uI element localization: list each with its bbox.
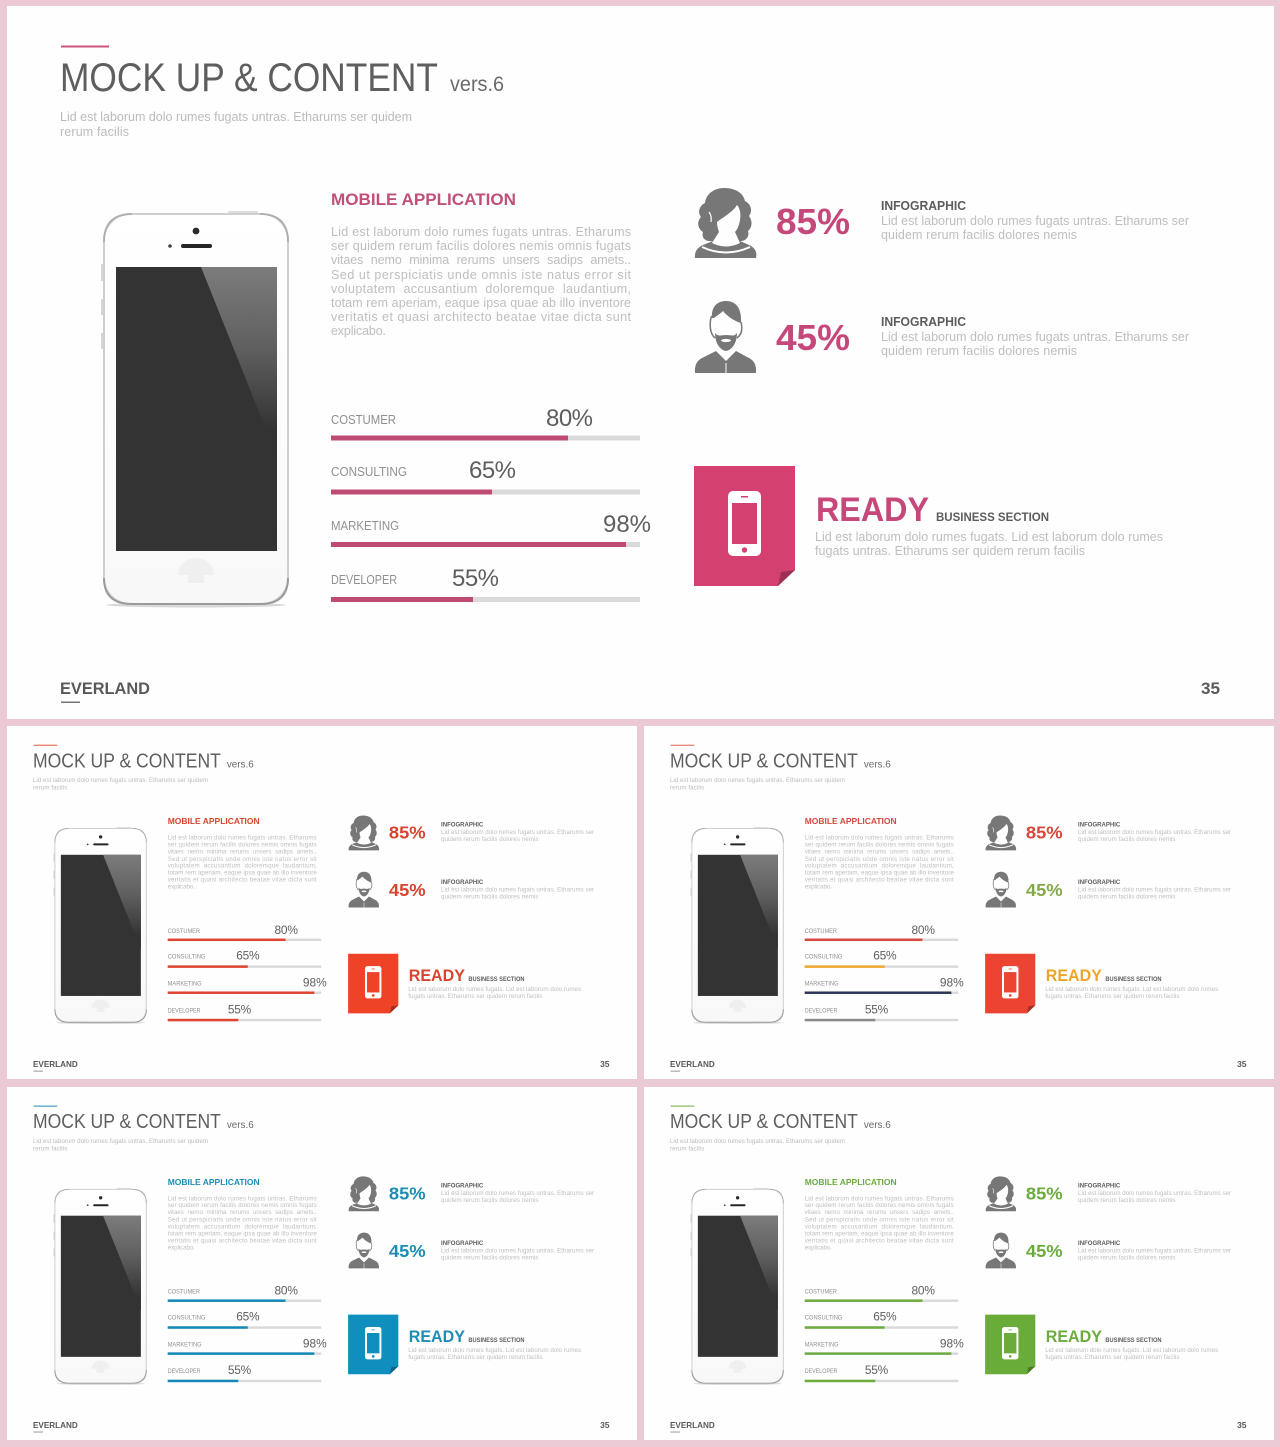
bar: consulting 65%: 65%: [469, 457, 516, 484]
text block: infographic 2: INFOGRAPHIC: [1078, 1240, 1121, 1247]
stat: 45%: 45%: [1026, 880, 1063, 900]
footer brand: EVERLAND: [33, 1059, 78, 1069]
callout: ready: Lid est laborum dolo rumes fugats. Lid est laborum dolo rumes: [408, 1347, 581, 1354]
title: vers.6: [227, 1120, 254, 1131]
bar: consulting 65%: 65%: [236, 949, 260, 963]
text block: description: Lid est laborum dolo rumes fugats untras. Etharums: [805, 1195, 954, 1202]
subtitle: Lid est laborum dolo rumes fugats untras. Etharums ser quidem: [33, 1138, 208, 1145]
icon: man: [695, 301, 756, 373]
page number: 35: [600, 1059, 610, 1069]
text block: description: voluptatem accusantium doloremque laudantium,: [331, 282, 631, 296]
callout: ready: fugats untras. Etharums ser quidem rerum facilis: [1045, 1354, 1179, 1361]
stat: 85%: 85%: [389, 822, 426, 842]
text block: infographic 1: [441, 1182, 594, 1204]
bar: developer 55%: 55%: [452, 565, 499, 592]
stat: 85%: 85%: [389, 1183, 426, 1203]
bar: costumer 80%: 80%: [912, 1284, 935, 1298]
text block: infographic 2: [881, 314, 1189, 358]
text block: infographic 1: INFOGRAPHIC: [441, 1182, 484, 1189]
bar: marketing 98%: 98%: [603, 511, 651, 538]
bar chart: [168, 923, 327, 1021]
panel: multicolour slide: [644, 726, 1274, 1079]
text block: description: explicabo.: [805, 1244, 832, 1251]
icon: woman: [986, 816, 1016, 850]
bar: costumer 80%: 80%: [275, 923, 298, 937]
bar: costumer 80%: [805, 1284, 958, 1302]
icon: man: [349, 872, 379, 907]
icon: woman: [349, 1176, 379, 1211]
bar: marketing 98%: MARKETING: [168, 1341, 202, 1348]
heading: mobile application: MOBILE APPLICATION: [168, 816, 260, 826]
callout: ready: BUSINESS SECTION: [468, 977, 525, 983]
bar: marketing 98%: 98%: [940, 1336, 964, 1350]
phone mockup: [53, 1188, 146, 1385]
stat: 45%: 45%: [389, 880, 426, 900]
callout: ready: BUSINESS SECTION: [1105, 977, 1162, 983]
text block: description: ser quidem rerum facilis dolores nemis omnis fugats: [805, 841, 954, 848]
subtitle: [670, 777, 845, 792]
title: MOCK UP & CONTENT: [670, 1111, 858, 1133]
text block: infographic 2: quidem rerum facilis dolores nemis: [1078, 894, 1175, 901]
phone mockup: [690, 1188, 783, 1385]
text block: infographic 1: INFOGRAPHIC: [881, 198, 967, 213]
bar: marketing 98%: [168, 976, 327, 994]
text block: description: voluptatem accusantium doloremque laudantium,: [805, 1224, 954, 1231]
bar: costumer 80%: COSTUMER: [805, 928, 837, 935]
title: MOCK UP & CONTENT: [670, 750, 858, 772]
callout: ready: Lid est laborum dolo rumes fugats. Lid est laborum dolo rumes: [1045, 1347, 1218, 1354]
text block: description: explicabo.: [168, 1244, 195, 1251]
bar: developer 55%: [805, 1002, 958, 1021]
bar: consulting 65%: [331, 457, 640, 494]
text block: infographic 1: [441, 821, 594, 843]
icon: phone badge: [348, 1315, 398, 1374]
bar: costumer 80%: COSTUMER: [805, 1289, 837, 1296]
text block: infographic 2: INFOGRAPHIC: [441, 1240, 484, 1247]
bar: marketing 98%: MARKETING: [168, 981, 202, 988]
title: MOCK UP & CONTENT: [60, 56, 438, 100]
text block: infographic 2: [1078, 879, 1231, 901]
stat: 45%: 45%: [776, 317, 850, 358]
icon: man: [986, 1233, 1016, 1268]
bar: consulting 65%: CONSULTING: [805, 954, 842, 961]
subtitle: rerum facilis: [670, 1146, 704, 1153]
bar chart: [331, 405, 651, 602]
stat: 45%: 45%: [389, 1241, 426, 1261]
callout: ready: Lid est laborum dolo rumes fugats. Lid est laborum dolo rumes: [815, 530, 1163, 544]
bar: developer 55%: 55%: [228, 1002, 252, 1016]
bar chart: [805, 1284, 964, 1382]
text block: infographic 1: Lid est laborum dolo rumes fugats untras. Etharums ser: [1078, 829, 1231, 836]
text block: infographic 2: [441, 879, 594, 901]
bar: developer 55%: 55%: [228, 1363, 252, 1377]
icon: woman: [349, 816, 379, 850]
bar: costumer 80%: COSTUMER: [168, 928, 200, 935]
title: MOCK UP & CONTENT: [33, 750, 221, 772]
bar: developer 55%: DEVELOPER: [805, 1007, 838, 1014]
callout: ready: fugats untras. Etharums ser quidem rerum facilis: [1045, 993, 1179, 1000]
phone mockup: [101, 211, 288, 608]
subtitle: Lid est laborum dolo rumes fugats untras. Etharums ser quidem: [33, 777, 208, 784]
text block: infographic 1: [1078, 821, 1231, 843]
bar: consulting 65%: [168, 1310, 321, 1329]
bar: costumer 80%: [331, 405, 640, 440]
bar: consulting 65%: [805, 1310, 958, 1329]
heading: mobile application: MOBILE APPLICATION: [168, 1177, 260, 1187]
text block: description: vitaes nemo minima rerums unsers sadips amets..: [168, 848, 317, 855]
page number: 35: [1201, 679, 1220, 698]
bar: costumer 80%: [168, 923, 321, 941]
heading: mobile application: MOBILE APPLICATION: [805, 1177, 897, 1187]
text block: description: [331, 225, 632, 338]
text block: description: voluptatem accusantium doloremque laudantium,: [168, 1224, 317, 1231]
subtitle: Lid est laborum dolo rumes fugats untras. Etharums ser quidem: [60, 110, 412, 124]
subtitle: Lid est laborum dolo rumes fugats untras. Etharums ser quidem: [670, 1138, 845, 1145]
footer brand: EVERLAND: [670, 1420, 715, 1430]
text block: description: veritatis et quasi architecto beatae vitae dicta sunt: [331, 310, 632, 324]
stat: 85%: 85%: [776, 201, 850, 242]
callout: ready: fugats untras. Etharums ser quidem rerum facilis: [408, 1354, 542, 1361]
panel: green slide: [644, 1087, 1274, 1440]
text block: infographic 2: INFOGRAPHIC: [441, 879, 484, 886]
text block: infographic 1: INFOGRAPHIC: [1078, 1182, 1121, 1189]
text block: description: Lid est laborum dolo rumes fugats untras. Etharums: [805, 834, 954, 841]
text block: description: totam rem aperiam, eaque ipsa quae ab illo inventore: [805, 870, 954, 877]
callout: ready: BUSINESS SECTION: [468, 1338, 525, 1344]
heading: mobile application: MOBILE APPLICATION: [805, 816, 897, 826]
bar: marketing 98%: [331, 511, 651, 547]
text block: description: totam rem aperiam, eaque ipsa quae ab illo inventore: [168, 1231, 317, 1238]
stat: 85%: 85%: [1026, 1183, 1063, 1203]
panel: main slide (magenta): [7, 6, 1274, 719]
bar: developer 55%: 55%: [865, 1363, 889, 1377]
text block: description: veritatis et quasi architecto beatae vitae dicta sunt: [168, 877, 317, 884]
text block: description: totam rem aperiam, eaque ipsa quae ab illo inventore: [805, 1231, 954, 1238]
callout: ready: [1045, 1327, 1218, 1361]
callout: ready: READY: [816, 491, 929, 529]
text block: infographic 2: Lid est laborum dolo rumes fugats untras. Etharums ser: [881, 330, 1189, 344]
icon: man: [986, 872, 1016, 907]
bar chart: [805, 923, 964, 1021]
text block: description: [168, 1195, 317, 1251]
stat: 85%: 85%: [1026, 822, 1063, 842]
bar: consulting 65%: 65%: [873, 1310, 897, 1324]
text block: infographic 1: Lid est laborum dolo rumes fugats untras. Etharums ser: [441, 829, 594, 836]
text block: description: [805, 834, 954, 891]
bar: consulting 65%: [805, 949, 958, 968]
text block: infographic 1: INFOGRAPHIC: [441, 821, 484, 828]
text block: description: Lid est laborum dolo rumes fugats untras. Etharums: [331, 225, 631, 239]
callout: ready: [408, 1327, 581, 1361]
text block: description: vitaes nemo minima rerums unsers sadips amets..: [805, 1209, 954, 1216]
bar: consulting 65%: CONSULTING: [331, 464, 407, 479]
text block: description: vitaes nemo minima rerums unsers sadips amets..: [805, 848, 954, 855]
bar: consulting 65%: 65%: [236, 1310, 260, 1324]
text block: infographic 2: INFOGRAPHIC: [881, 314, 967, 329]
bar: developer 55%: DEVELOPER: [805, 1368, 838, 1375]
text block: description: explicabo.: [331, 324, 386, 338]
bar: developer 55%: [168, 1363, 321, 1382]
bar: developer 55%: DEVELOPER: [331, 572, 397, 587]
text block: description: voluptatem accusantium doloremque laudantium,: [168, 863, 317, 870]
callout: ready: Lid est laborum dolo rumes fugats. Lid est laborum dolo rumes: [408, 986, 581, 993]
bar: developer 55%: [168, 1002, 321, 1021]
text block: infographic 1: Lid est laborum dolo rumes fugats untras. Etharums ser: [881, 214, 1189, 228]
panel: red slide: [7, 726, 637, 1079]
text block: infographic 2: Lid est laborum dolo rumes fugats untras. Etharums ser: [1078, 887, 1231, 894]
icon: phone badge: [348, 954, 398, 1013]
bar: developer 55%: DEVELOPER: [168, 1007, 201, 1014]
text block: description: [168, 834, 317, 891]
callout: ready: READY: [409, 1327, 465, 1346]
bar: costumer 80%: COSTUMER: [168, 1289, 200, 1296]
text block: infographic 1: Lid est laborum dolo rumes fugats untras. Etharums ser: [1078, 1190, 1231, 1197]
bar: marketing 98%: MARKETING: [331, 518, 399, 533]
subtitle: [33, 1138, 208, 1153]
text block: description: ser quidem rerum facilis dolores nemis omnis fugats: [168, 1202, 317, 1209]
icon: phone badge: [985, 1315, 1035, 1374]
panel: blue slide: [7, 1087, 637, 1440]
title: vers.6: [450, 73, 504, 96]
text block: infographic 2: Lid est laborum dolo rumes fugats untras. Etharums ser: [1078, 1247, 1231, 1254]
subtitle: rerum facilis: [33, 1146, 67, 1153]
bar: marketing 98%: 98%: [303, 976, 327, 990]
text block: infographic 1: [881, 198, 1189, 242]
text block: description: Sed ut perspiciatis unde omnis iste natus error sit: [331, 268, 632, 282]
text block: description: vitaes nemo minima rerums unsers sadips amets..: [331, 253, 631, 267]
subtitle: [33, 777, 208, 792]
bar: costumer 80%: [805, 923, 958, 941]
footer brand: EVERLAND: [60, 679, 150, 698]
bar: consulting 65%: CONSULTING: [168, 954, 205, 961]
callout: ready: BUSINESS SECTION: [1105, 1338, 1162, 1344]
page number: 35: [1237, 1420, 1247, 1430]
bar: marketing 98%: 98%: [940, 976, 964, 990]
text block: description: Lid est laborum dolo rumes fugats untras. Etharums: [168, 1195, 317, 1202]
bar: costumer 80%: COSTUMER: [331, 412, 396, 427]
title: vers.6: [227, 759, 254, 770]
text block: description: Lid est laborum dolo rumes fugats untras. Etharums: [168, 834, 317, 841]
bar: marketing 98%: MARKETING: [805, 1341, 839, 1348]
text block: description: Sed ut perspiciatis unde omnis iste natus error sit: [805, 1217, 954, 1224]
text block: infographic 2: quidem rerum facilis dolores nemis: [881, 344, 1077, 358]
phone mockup: [690, 827, 783, 1024]
text block: description: totam rem aperiam, eaque ipsa quae ab illo inventore: [168, 870, 317, 877]
text block: infographic 2: INFOGRAPHIC: [1078, 879, 1121, 886]
text block: description: veritatis et quasi architecto beatae vitae dicta sunt: [805, 1238, 954, 1245]
subtitle: [60, 110, 412, 139]
bar: developer 55%: DEVELOPER: [168, 1368, 201, 1375]
title: vers.6: [864, 1120, 891, 1131]
callout: ready: [815, 491, 1163, 558]
bar: developer 55%: [805, 1363, 958, 1382]
text block: infographic 1: quidem rerum facilis dolores nemis: [1078, 1197, 1175, 1204]
text block: description: vitaes nemo minima rerums unsers sadips amets..: [168, 1209, 317, 1216]
page number: 35: [600, 1420, 610, 1430]
icon: woman: [695, 188, 756, 258]
callout: ready: BUSINESS SECTION: [936, 510, 1049, 524]
icon: woman: [986, 1176, 1016, 1211]
text block: description: explicabo.: [168, 884, 195, 891]
text block: infographic 1: quidem rerum facilis dolores nemis: [441, 1197, 538, 1204]
callout: ready: [408, 966, 581, 1000]
bar: developer 55%: 55%: [865, 1002, 889, 1016]
text block: infographic 2: [1078, 1240, 1231, 1261]
callout: ready: Lid est laborum dolo rumes fugats. Lid est laborum dolo rumes: [1045, 986, 1218, 993]
text block: description: voluptatem accusantium doloremque laudantium,: [805, 863, 954, 870]
subtitle: rerum facilis: [60, 125, 129, 139]
page number: 35: [1237, 1059, 1247, 1069]
bar: costumer 80%: [168, 1284, 321, 1302]
subtitle: rerum facilis: [33, 785, 67, 792]
title: vers.6: [864, 759, 891, 770]
bar: marketing 98%: 98%: [303, 1336, 327, 1350]
callout: ready: fugats untras. Etharums ser quidem rerum facilis: [815, 544, 1085, 558]
callout: ready: READY: [1046, 1327, 1102, 1346]
text block: infographic 1: Lid est laborum dolo rumes fugats untras. Etharums ser: [441, 1190, 594, 1197]
bar chart: [168, 1284, 327, 1382]
icon: man: [349, 1233, 379, 1268]
text block: infographic 2: quidem rerum facilis dolores nemis: [1078, 1254, 1175, 1261]
bar: costumer 80%: 80%: [275, 1284, 298, 1298]
text block: infographic 1: quidem rerum facilis dolores nemis: [881, 228, 1077, 242]
footer brand: EVERLAND: [670, 1059, 715, 1069]
text block: description: ser quidem rerum facilis dolores nemis omnis fugats: [168, 841, 317, 848]
text block: description: ser quidem rerum facilis dolores nemis omnis fugats: [805, 1202, 954, 1209]
bar: consulting 65%: 65%: [873, 949, 897, 963]
bar: developer 55%: [331, 565, 640, 602]
text block: description: veritatis et quasi architecto beatae vitae dicta sunt: [168, 1238, 317, 1245]
bar: marketing 98%: [805, 976, 964, 994]
text block: description: ser quidem rerum facilis dolores nemis omnis fugats: [331, 239, 631, 253]
title: MOCK UP & CONTENT: [33, 1111, 221, 1133]
text block: infographic 2: Lid est laborum dolo rumes fugats untras. Etharums ser: [441, 1247, 594, 1254]
callout: ready: [1045, 966, 1218, 1000]
icon: phone badge: [985, 954, 1035, 1013]
subtitle: [670, 1138, 845, 1153]
text block: description: totam rem aperiam, eaque ipsa quae ab illo inventore: [331, 296, 631, 310]
text block: infographic 2: Lid est laborum dolo rumes fugats untras. Etharums ser: [441, 887, 594, 894]
callout: ready: fugats untras. Etharums ser quidem rerum facilis: [408, 993, 542, 1000]
bar: marketing 98%: [805, 1336, 964, 1355]
text block: infographic 1: [1078, 1182, 1231, 1204]
text block: infographic 2: quidem rerum facilis dolores nemis: [441, 894, 538, 901]
subtitle: Lid est laborum dolo rumes fugats untras. Etharums ser quidem: [670, 777, 845, 784]
bar: marketing 98%: [168, 1336, 327, 1355]
bar: consulting 65%: CONSULTING: [168, 1315, 205, 1322]
footer brand: EVERLAND: [33, 1420, 78, 1430]
bar: costumer 80%: 80%: [912, 923, 935, 937]
callout: ready: READY: [1046, 966, 1102, 985]
phone mockup: [53, 827, 146, 1024]
subtitle: rerum facilis: [670, 785, 704, 792]
text block: infographic 1: quidem rerum facilis dolores nemis: [441, 836, 538, 843]
callout: ready: READY: [409, 966, 465, 985]
text block: description: Sed ut perspiciatis unde omnis iste natus error sit: [168, 1217, 317, 1224]
text block: infographic 1: quidem rerum facilis dolores nemis: [1078, 836, 1175, 843]
text block: description: [805, 1195, 954, 1251]
text block: infographic 1: INFOGRAPHIC: [1078, 821, 1121, 828]
text block: description: explicabo.: [805, 884, 832, 891]
bar: marketing 98%: MARKETING: [805, 981, 839, 988]
icon: phone badge: [694, 466, 795, 586]
text block: infographic 2: quidem rerum facilis dolores nemis: [441, 1254, 538, 1261]
text block: description: Sed ut perspiciatis unde omnis iste natus error sit: [805, 856, 954, 863]
heading: mobile application: MOBILE APPLICATION: [331, 190, 516, 209]
text block: description: veritatis et quasi architecto beatae vitae dicta sunt: [805, 877, 954, 884]
bar: consulting 65%: [168, 949, 321, 968]
bar: consulting 65%: CONSULTING: [805, 1315, 842, 1322]
stat: 45%: 45%: [1026, 1241, 1063, 1261]
text block: description: Sed ut perspiciatis unde omnis iste natus error sit: [168, 856, 317, 863]
text block: infographic 2: [441, 1240, 594, 1261]
bar: costumer 80%: 80%: [546, 405, 593, 432]
